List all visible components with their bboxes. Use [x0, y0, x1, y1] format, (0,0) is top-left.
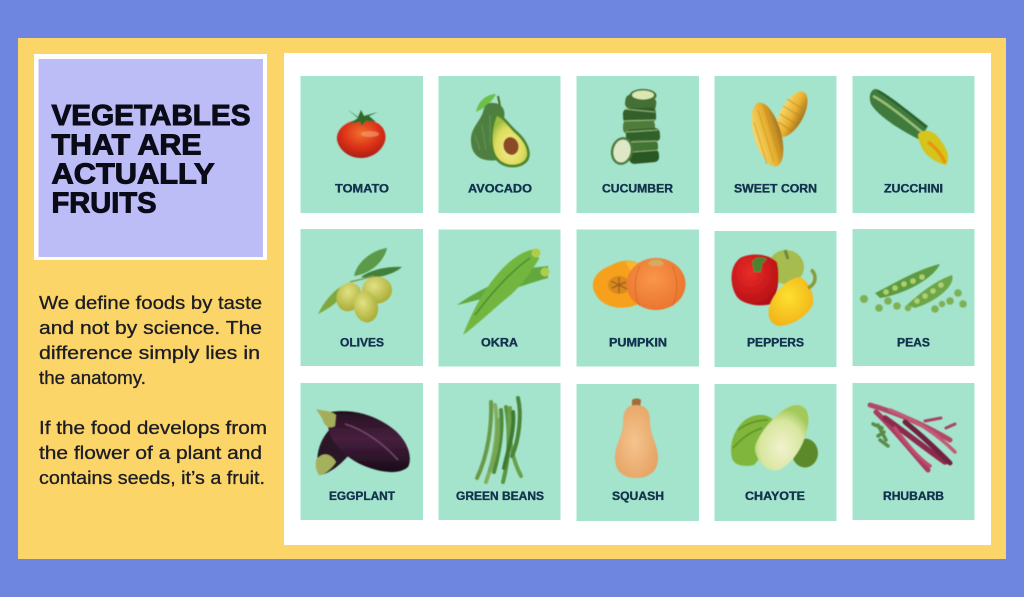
intro text: the anatomy. [39, 368, 146, 388]
icon: peppers [732, 250, 815, 326]
card: peas [852, 229, 974, 366]
definition text: If the food develops from [39, 418, 267, 438]
title: FRUITS [52, 188, 156, 220]
title: ACTUALLY [52, 158, 214, 190]
card: squash: SQUASH [612, 491, 664, 503]
card: eggplant: EGGPLANT [329, 491, 395, 503]
card: pumpkin: PUMPKIN [609, 338, 667, 350]
card: olives: OLIVES [340, 338, 384, 350]
intro text [39, 293, 262, 388]
title [52, 100, 250, 220]
definition text: the flower of a plant and [39, 443, 262, 463]
card: pumpkin [576, 230, 699, 366]
title box [34, 54, 267, 260]
icon: avocado [471, 94, 530, 167]
card: chayote: CHAYOTE [745, 491, 805, 503]
card: sweet corn [714, 76, 836, 213]
card: rhubarb: RHUBARB [883, 491, 944, 503]
icon: cucumber [608, 89, 660, 167]
card: olives [300, 229, 423, 366]
icon: rhubarb [870, 405, 955, 470]
icon: peas [860, 264, 967, 313]
card: peppers: PEPPERS [747, 338, 804, 350]
white grid panel [284, 53, 991, 545]
icon: squash [615, 398, 658, 478]
card: cucumber [576, 76, 699, 213]
card: chayote [714, 384, 836, 521]
card: avocado: AVOCADO [468, 184, 532, 196]
card: avocado [438, 76, 560, 213]
card: eggplant [300, 383, 423, 520]
definition text: contains seeds, it’s a fruit. [39, 468, 265, 488]
icon: pumpkin [593, 258, 686, 310]
card: tomato: TOMATO [335, 184, 389, 196]
icon: chayote [731, 405, 818, 470]
card: okra: OKRA [481, 338, 518, 350]
card: green beans: GREEN BEANS [456, 491, 544, 503]
card: cucumber: CUCUMBER [602, 184, 674, 196]
card: tomato [300, 76, 423, 213]
card: sweet corn: SWEET CORN [734, 184, 817, 196]
icon: eggplant [316, 409, 410, 475]
icon: tomato [337, 109, 386, 158]
card: okra [438, 230, 560, 366]
icon: green beans [477, 398, 521, 482]
title: VEGETABLES [52, 100, 250, 132]
card: peppers [714, 231, 836, 367]
icon: okra [457, 248, 550, 335]
card: rhubarb [852, 383, 974, 520]
card: zucchini: ZUCCHINI [884, 184, 943, 196]
intro text: We define foods by taste [39, 293, 262, 313]
intro text: and not by science. The [39, 318, 262, 338]
card: peas: PEAS [897, 338, 930, 350]
icon: zucchini [870, 89, 948, 165]
icon: olives [318, 248, 402, 324]
intro text: difference simply lies in [39, 343, 260, 363]
title: THAT ARE [52, 130, 202, 162]
card: zucchini [852, 76, 974, 213]
card: green beans [438, 383, 560, 520]
definition text [39, 418, 267, 488]
card: squash [576, 384, 699, 521]
icon: sweet corn [745, 87, 814, 170]
